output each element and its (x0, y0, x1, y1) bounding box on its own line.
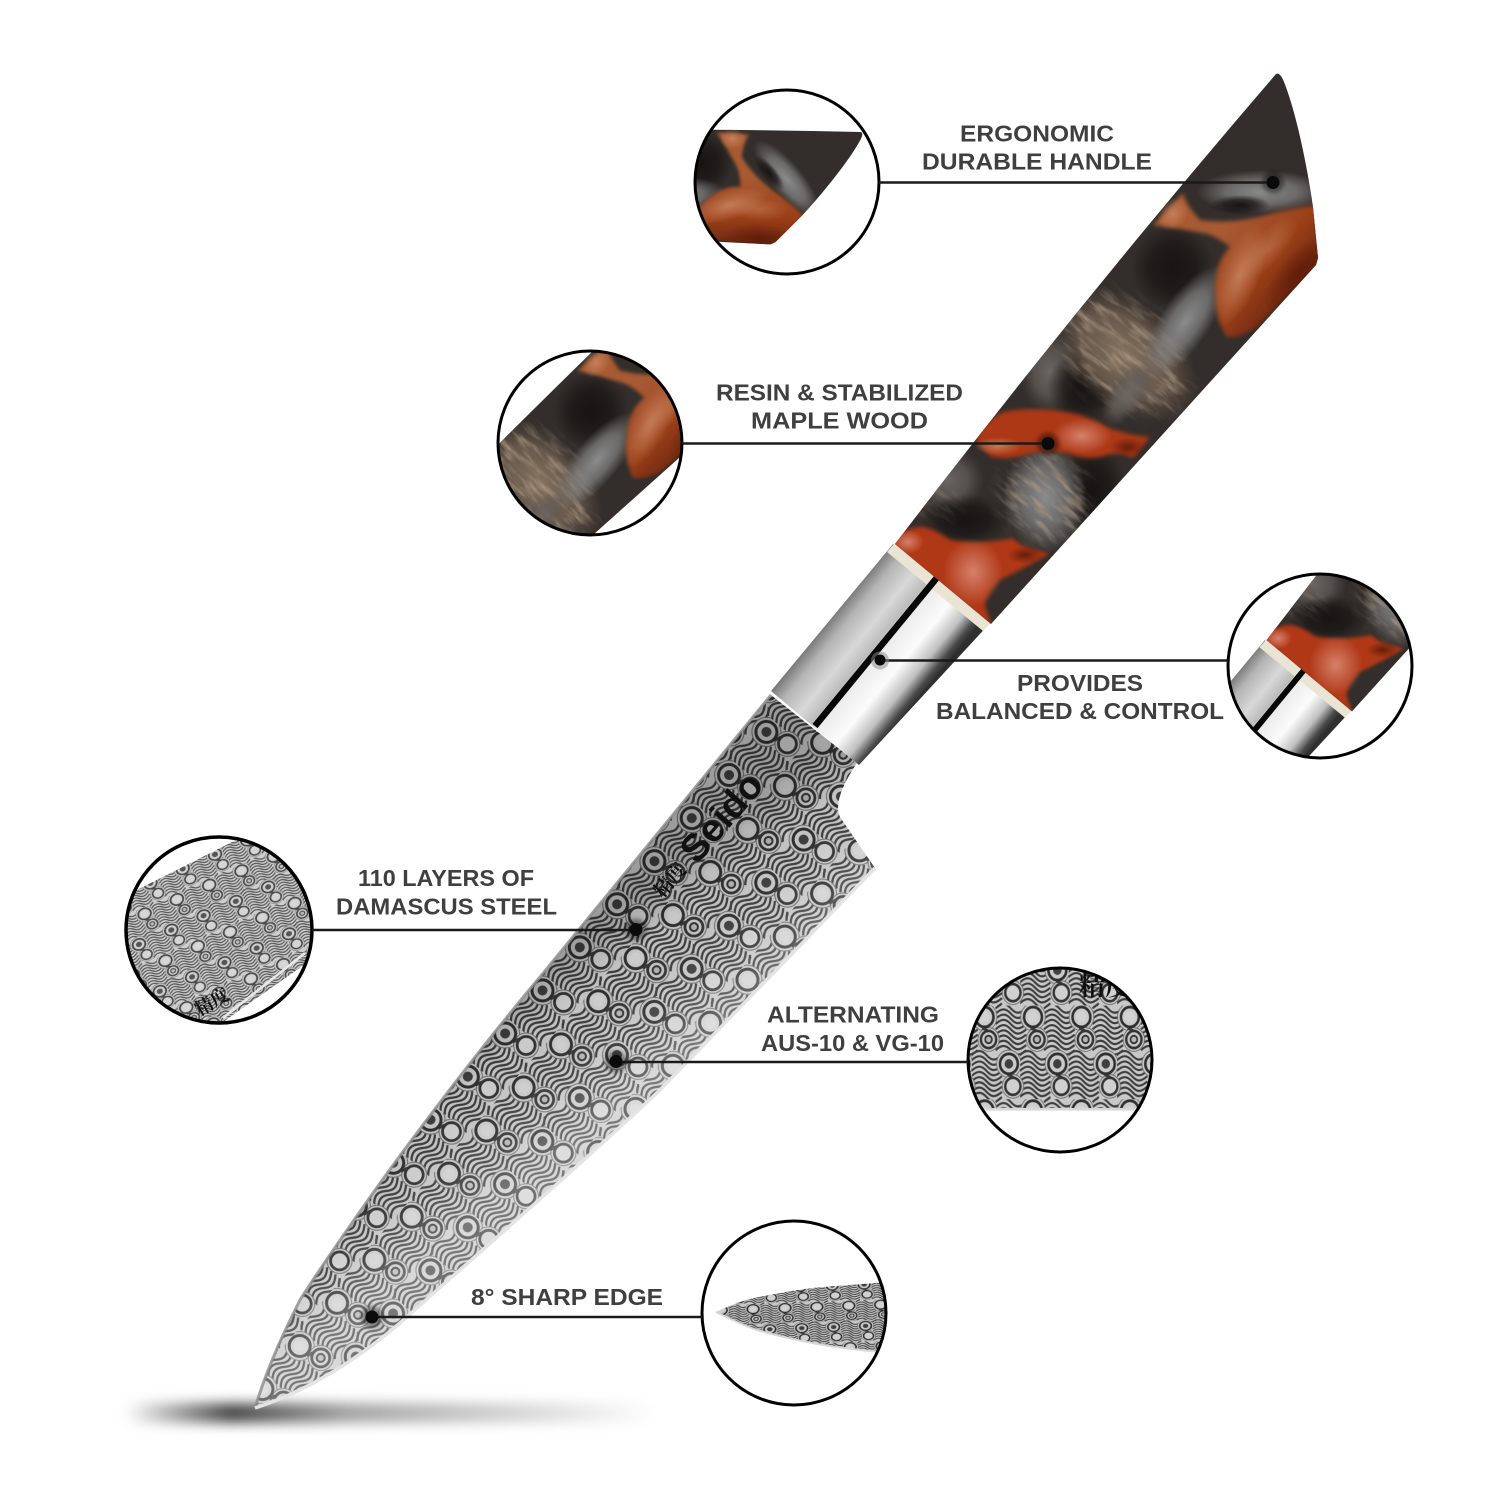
label: DAMASCUS STEEL (336, 894, 557, 920)
callout: 8 degree sharp edge (361, 1221, 890, 1405)
leader line and dot (361, 1306, 702, 1328)
label: ERGONOMIC (960, 120, 1114, 146)
zoom circle: steel layers (960, 960, 1160, 1152)
leader line and dot (605, 1050, 968, 1072)
callout: 110 layers of damascus steel (120, 835, 647, 1035)
leader line and dot (312, 918, 647, 940)
ground shadow (125, 1403, 655, 1423)
label: DURABLE HANDLE (922, 148, 1152, 174)
brand kanji: 精度 (649, 858, 691, 902)
zoom circle: damascus layers: 精度 (191, 983, 233, 1020)
leader line and dot (871, 652, 1228, 670)
blade (255, 695, 875, 1408)
zoom circle: wood section (496, 350, 684, 536)
zoom circle: damascus layers (124, 835, 314, 1025)
label: PROVIDES (1017, 670, 1143, 696)
label: AUS-10 & VG-10 (761, 1030, 944, 1056)
label (922, 120, 1152, 174)
label (936, 670, 1224, 724)
zoom circle: steel layers: 精度 (1079, 972, 1131, 1001)
zoom circle: collar (1226, 572, 1414, 760)
metal collar (771, 543, 991, 765)
leader line and dot (879, 172, 1284, 194)
label: ALTERNATING (767, 1002, 939, 1028)
label (336, 865, 557, 920)
callout: ergonomic durable handle (694, 88, 1286, 276)
resin and maple handle (880, 60, 1348, 640)
knife (255, 60, 1348, 1408)
label: 8° SHARP EDGE (471, 1284, 663, 1310)
label (761, 1002, 944, 1056)
label: BALANCED & CONTROL (936, 698, 1224, 724)
label (716, 380, 963, 434)
label: 110 LAYERS OF (358, 865, 534, 891)
brand logo: Seido (672, 765, 772, 871)
zoom circle: handle end (694, 88, 880, 276)
callout: alternating aus-10 and vg-10 (605, 960, 1160, 1152)
label: RESIN & STABILIZED (716, 380, 963, 406)
callout: provides balance and control (871, 572, 1414, 760)
label: MAPLE WOOD (751, 408, 928, 434)
callout: resin and stabilized maple wood (496, 350, 1062, 536)
leader line and dot (682, 432, 1059, 454)
zoom circle: blade tip (702, 1221, 890, 1405)
